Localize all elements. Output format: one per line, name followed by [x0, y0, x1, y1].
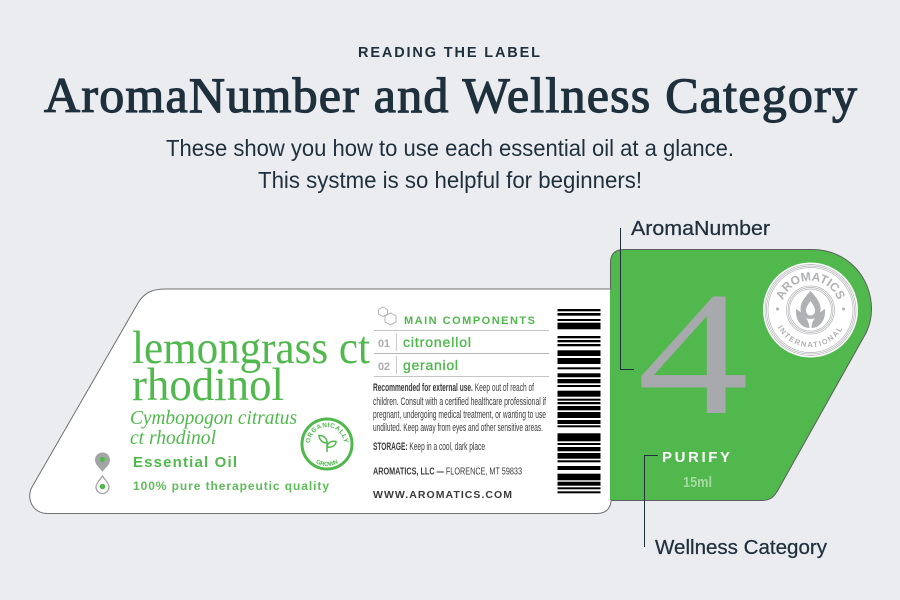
subtitle: [166, 135, 734, 193]
icon: molecule: [378, 307, 396, 325]
subtitle: This systme is so helpful for beginners!: [258, 167, 642, 193]
subtitle: These show you how to use each essential oil at a glance.: [166, 135, 734, 161]
oil name: lemongrass ct: [132, 322, 370, 374]
icon: aromatics seal: [763, 262, 858, 358]
warning text: undiluted. Keep away from eyes and other sensitive areas.: [373, 422, 543, 434]
quality text: 100% pure therapeutic quality: [133, 479, 329, 493]
component list: 02: [378, 361, 390, 373]
warning text: pregnant, undergoing medical treatment, or wanting to use: [373, 409, 546, 421]
callout: aromanumber: [620, 218, 770, 370]
component list: [374, 330, 549, 377]
barcode: [558, 309, 600, 493]
title: AromaNumber and Wellness Category: [44, 67, 857, 123]
component list: geraniol: [403, 357, 458, 373]
company line: AROMATICS, LLC — FLORENCE, MT 59833: [373, 466, 522, 478]
component list: 01: [378, 338, 390, 350]
panel: green aroma tab: [610, 249, 872, 501]
icon: drop: [96, 476, 109, 494]
latin name: ct rhodinol: [130, 427, 216, 449]
warning text: Recommended for external use. Keep out of reach of: [373, 382, 535, 394]
icon: location pin: [95, 452, 110, 472]
aroma number: 4: [637, 256, 749, 452]
oil name: rhodinol: [132, 359, 284, 411]
warning text: [373, 382, 547, 434]
wellness category text: PURIFY: [662, 449, 730, 466]
volume: 15ml: [683, 474, 712, 491]
website: WWW.AROMATICS.COM: [373, 489, 512, 501]
icon: aromatics seal: AROMATICS: [777, 272, 844, 300]
essential oil text: Essential Oil: [133, 454, 237, 471]
callout: aromanumber: AromaNumber: [631, 218, 770, 240]
warning text: children. Consult with a certified healthcare professional if: [373, 396, 547, 408]
cover: tab seam: [610, 290, 612, 500]
badge: organically grown: GROWN: [316, 460, 338, 466]
oil name: [132, 322, 370, 411]
panel: white label: [29, 288, 612, 514]
latin name: Cymbopogon citratus: [130, 407, 297, 429]
callout: wellness category: Wellness Category: [655, 537, 827, 559]
badge: organically grown: [300, 418, 354, 470]
latin name: [130, 407, 297, 449]
heading: main components: MAIN COMPONENTS: [404, 315, 535, 327]
eyebrow heading: READING THE LABEL: [358, 45, 540, 61]
component list: citronellol: [403, 334, 471, 350]
storage text: STORAGE: Keep in a cool, dark place: [373, 441, 485, 453]
badge: organically grown: ORGANICALLY: [306, 422, 348, 443]
icon: aromatics seal: INTERNATIONAL: [778, 325, 842, 347]
callout: wellness category: [644, 456, 827, 559]
